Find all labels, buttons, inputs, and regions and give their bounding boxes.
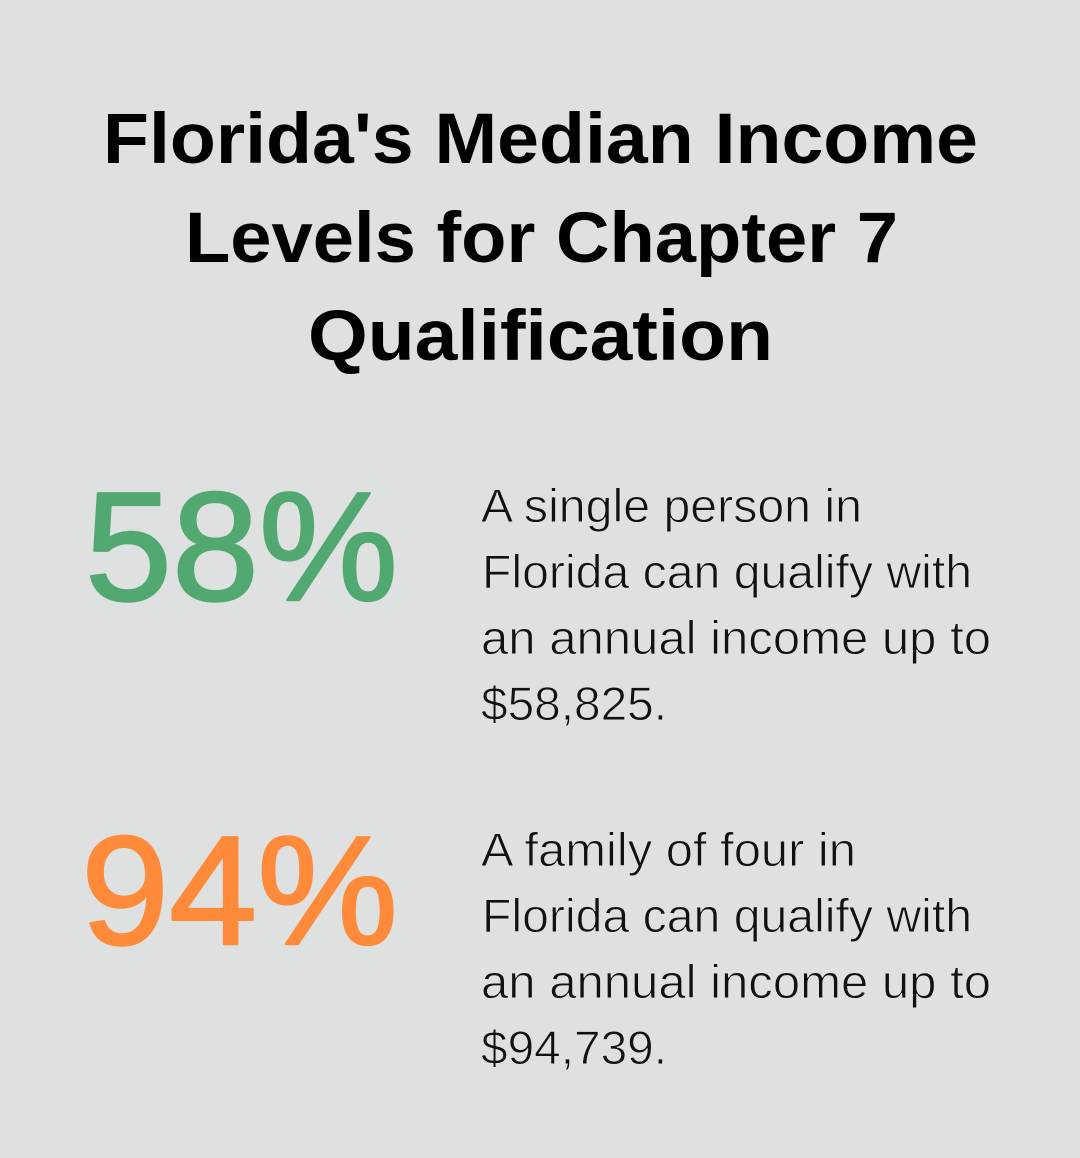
title: Florida's Median Income bbox=[103, 100, 978, 179]
title bbox=[103, 100, 978, 376]
text block: family of four: $94,739. bbox=[481, 1021, 667, 1074]
text block: family of four: Florida can qualify with bbox=[482, 889, 972, 942]
text block: single person: A single person in bbox=[481, 479, 862, 532]
text block: family of four: A family of four in bbox=[481, 823, 856, 876]
text block: family of four bbox=[481, 823, 991, 1074]
text block: single person: $58,825. bbox=[481, 677, 667, 730]
title: Levels for Chapter 7 bbox=[185, 199, 898, 278]
text block: single person: an annual income up to bbox=[481, 611, 991, 664]
stat: 94 percent: 94% bbox=[81, 804, 398, 977]
title: Qualification bbox=[308, 297, 773, 376]
stat: 58 percent: 58% bbox=[85, 460, 398, 633]
text block: family of four: an annual income up to bbox=[481, 955, 991, 1008]
text block: single person: Florida can qualify with bbox=[482, 545, 972, 598]
text block: single person bbox=[481, 479, 991, 730]
